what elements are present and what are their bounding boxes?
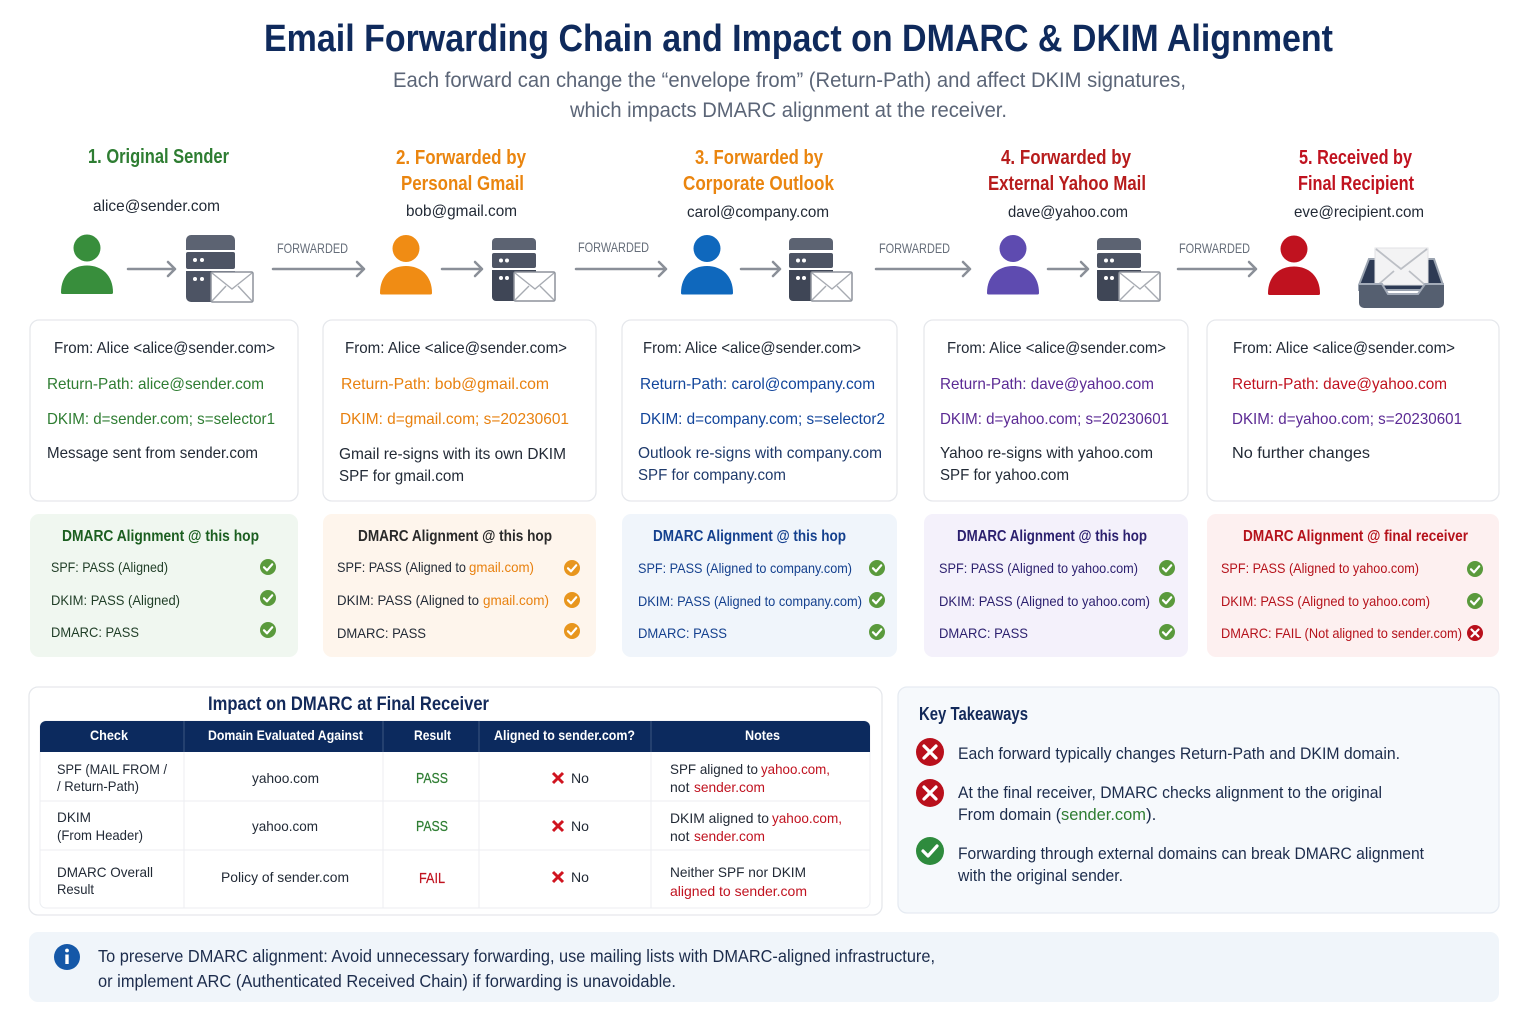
step 4 header (988, 147, 1146, 221)
step 3 header: Corporate Outlook (683, 173, 835, 195)
panel: card 2 headers: SPF for gmail.com (339, 468, 464, 485)
banner text: or implement ARC (Authenticated Received Chain) if forwarding is unavoidable. (98, 971, 676, 991)
panel: key takeaways (898, 687, 1499, 913)
panel: card 5 headers (1207, 320, 1499, 501)
table row: DKIM: No (571, 818, 589, 834)
panel: alignment 5 (1207, 514, 1499, 657)
table row: DMARC (57, 864, 807, 899)
step 2 header: bob@gmail.com (406, 203, 517, 220)
icon: server 3 (789, 238, 852, 301)
table row: DKIM: not (670, 828, 690, 844)
panel: impact table (29, 687, 882, 915)
panel: alignment 4: DKIM: PASS (Aligned to yahoo.com) (939, 593, 1150, 609)
banner text: To preserve DMARC alignment: Avoid unnecessary forwarding, use mailing lists with DMARC-aligned infrastructure, (98, 946, 935, 966)
table row: SPF: not (670, 779, 690, 795)
panel: alignment 5: DKIM: PASS (Aligned to yahoo.com) (1221, 593, 1430, 609)
table header row (40, 721, 870, 752)
panel: card 1 headers: Message sent from sender.com (47, 445, 258, 462)
takeaway 1: Each forward typically changes Return-Path and DKIM domain. (958, 744, 1400, 763)
icon: inbox tray (1359, 248, 1444, 308)
arrow: forward 3 (876, 262, 970, 276)
table row: SPF: sender.com (694, 779, 765, 795)
panel: alignment 3: DMARC: PASS (638, 625, 727, 641)
label: forwarded 4: FORWARDED (1179, 240, 1250, 256)
panel: alignment 2: gmail.com) (483, 592, 549, 608)
panel: card 1 headers: From: Alice <alice@sender.com> (54, 340, 275, 357)
panel: alignment 1: SPF: PASS (Aligned) (51, 559, 168, 575)
step 2 header: 2. Forwarded by (396, 147, 527, 169)
panel: alignment 3 (622, 514, 897, 657)
step 2 header (396, 147, 527, 220)
table row: SPF: PASS (416, 771, 448, 787)
takeaway 2: sender.com (1061, 805, 1146, 824)
table row: DMARC: Result (57, 881, 94, 897)
step 5 header: eve@recipient.com (1294, 204, 1424, 221)
table header row: Aligned to sender.com? (494, 727, 635, 743)
table row: SPF: / Return-Path) (57, 778, 139, 794)
table row: DKIM: sender.com (694, 828, 765, 844)
panel: alignment 4: SPF: PASS (Aligned to yahoo.com) (939, 560, 1138, 576)
step 1 header: alice@sender.com (93, 198, 220, 215)
arrow: forward 1 (273, 262, 364, 276)
table row: DKIM: PASS (416, 819, 448, 835)
panel: alignment 2 (323, 514, 596, 657)
table row: SPF: SPF (MAIL FROM / (57, 761, 167, 777)
panel: alignment 1: DMARC: PASS (51, 624, 139, 640)
table row: DKIM: yahoo.com, (772, 810, 842, 826)
icon: info (54, 944, 80, 970)
table row: SPF: yahoo.com (252, 770, 319, 786)
table body frame (40, 721, 870, 908)
panel: alignment 5: SPF: PASS (Aligned to yahoo.com) (1221, 560, 1419, 576)
table row: DMARC: aligned to sender.com (670, 883, 807, 899)
panel: card 4 headers: DKIM: d=yahoo.com; s=20230601 (940, 411, 1169, 428)
panel: card 2 headers: Return-Path: bob@gmail.com (341, 376, 549, 393)
step 5 header: 5. Received by (1299, 147, 1413, 169)
table heading: Impact on DMARC at Final Receiver (208, 694, 490, 715)
panel: card 1 headers: Return-Path: alice@sender.com (47, 376, 264, 393)
panel: alignment 3: DKIM: PASS (Aligned to company.com) (638, 593, 862, 609)
step 5 header: Final Recipient (1298, 173, 1414, 195)
step 4 header: External Yahoo Mail (988, 173, 1146, 195)
step 5 header (1294, 147, 1424, 221)
takeaway 3: Forwarding through external domains can break DMARC alignment (958, 844, 1424, 863)
table row: DKIM: yahoo.com (252, 818, 318, 834)
panel: alignment 1: DMARC Alignment @ this hop (62, 528, 259, 545)
table row: DMARC: Policy of sender.com (221, 869, 349, 885)
panel: card 3 headers: From: Alice <alice@sender.com> (643, 340, 861, 357)
table header row: Notes (745, 727, 780, 743)
subtitle (393, 69, 1186, 122)
panel: card 2 headers: From: Alice <alice@sender.com> (345, 340, 567, 357)
panel: alignment 2: DKIM: PASS (Aligned to (337, 592, 479, 608)
step 4 header: dave@yahoo.com (1008, 204, 1128, 221)
step 2 header: Personal Gmail (401, 173, 524, 195)
step 3 header: carol@company.com (687, 204, 829, 221)
table header row: Check (90, 727, 128, 743)
panel: alignment 5: DMARC: FAIL (Not aligned to sender.com) (1221, 625, 1462, 641)
panel: alignment 4: DMARC Alignment @ this hop (957, 528, 1147, 545)
arrow: forward 4 (1178, 262, 1256, 276)
table row: SPF: yahoo.com, (761, 761, 830, 777)
panel: card 5 headers: From: Alice <alice@sender.com> (1233, 340, 1455, 357)
icon: server 4 (1097, 238, 1160, 301)
arrow: Dave to server (1048, 262, 1088, 276)
panel: alignment 5: DMARC Alignment @ final receiver (1243, 528, 1468, 545)
icon: server 1 (186, 235, 253, 302)
panel: card 3 headers: Outlook re-signs with company.com (638, 445, 882, 462)
panel: card 2 headers: DKIM: d=gmail.com; s=20230601 (340, 411, 569, 428)
panel: card 4 headers: SPF for yahoo.com (940, 467, 1069, 484)
icon: server 2 (492, 238, 555, 301)
takeaway 2: At the final receiver, DMARC checks alignment to the original (958, 783, 1382, 802)
table row: DKIM: DKIM aligned to (670, 810, 769, 826)
step 1 header: 1. Original Sender (88, 146, 229, 168)
icon: person sender (61, 234, 113, 294)
panel: card 3 headers: Return-Path: carol@company.com (640, 376, 875, 393)
step 3 header (683, 147, 835, 221)
panel: alignment 2: DMARC: PASS (337, 625, 426, 641)
table row: DMARC: DMARC Overall (57, 864, 153, 880)
panel: card 5 headers: DKIM: d=yahoo.com; s=20230601 (1232, 411, 1462, 428)
panel: alignment 2: SPF: PASS (Aligned to (337, 559, 466, 575)
icon: person Eve (1268, 236, 1320, 295)
table row: DKIM (57, 809, 842, 844)
table row: DMARC: FAIL (419, 871, 445, 887)
takeaway 2: ). (1146, 805, 1156, 824)
banner text (98, 946, 935, 991)
takeaway 3 (916, 837, 1424, 885)
table header row: Result (414, 727, 451, 743)
title: Email Forwarding Chain and Impact on DMARC & DKIM Alignment (264, 18, 1333, 60)
step 4 header: 4. Forwarded by (1001, 147, 1132, 169)
panel: card 4 headers (924, 320, 1188, 501)
panel: recommendation banner (29, 932, 1499, 1002)
panel: card 1 headers: DKIM: d=sender.com; s=selector1 (47, 411, 275, 428)
arrow: Bob to server (442, 262, 482, 276)
takeaway 3: with the original sender. (957, 866, 1123, 885)
table row: DMARC: Neither SPF nor DKIM (670, 864, 806, 880)
arrow: forward 2 (576, 262, 666, 276)
panel: card 5 headers: Return-Path: dave@yahoo.com (1232, 376, 1447, 393)
takeaway 2: From domain ( (958, 805, 1061, 824)
panel: card 1 headers (30, 320, 298, 501)
label: forwarded 1: FORWARDED (277, 240, 348, 256)
table row: DMARC: No (571, 869, 589, 885)
panel: card 5 headers: No further changes (1232, 445, 1370, 462)
subtitle: Each forward can change the “envelope from” (Return-Path) and affect DKIM signatures, (393, 69, 1186, 92)
panel: alignment 3: SPF: PASS (Aligned to company.com) (638, 560, 852, 576)
panel: card 4 headers: From: Alice <alice@sender.com> (947, 340, 1166, 357)
panel: alignment 4 (924, 514, 1188, 657)
panel: alignment 3: DMARC Alignment @ this hop (653, 528, 846, 545)
panel: card 3 headers: DKIM: d=company.com; s=selector2 (640, 411, 885, 428)
panel: alignment 2: gmail.com) (469, 559, 534, 575)
icon: person Dave (987, 235, 1039, 294)
panel: card 2 headers: Gmail re-signs with its own DKIM (339, 446, 566, 463)
panel: alignment 4: DMARC: PASS (939, 625, 1028, 641)
table row: SPF: No (571, 770, 589, 786)
takeaways heading: Key Takeaways (919, 704, 1028, 724)
arrow: Carol to server (741, 262, 780, 276)
icon: person Bob (380, 235, 432, 294)
panel: alignment 1 (30, 514, 298, 657)
panel: card 3 headers (622, 320, 897, 501)
panel: card 3 headers: SPF for company.com (638, 467, 786, 484)
table row: DKIM: DKIM (57, 809, 91, 825)
table row: SPF: SPF aligned to (670, 761, 758, 777)
panel: alignment 2: DMARC Alignment @ this hop (358, 528, 552, 545)
takeaway 1 (916, 738, 1400, 766)
label: forwarded 3: FORWARDED (879, 240, 950, 256)
arrow: sender to server (128, 262, 175, 276)
step 1 header (88, 146, 229, 215)
panel: card 4 headers: Yahoo re-signs with yahoo.com (940, 445, 1153, 462)
table header row: Domain Evaluated Against (208, 727, 363, 743)
table row: DKIM: (From Header) (57, 827, 143, 843)
step 3 header: 3. Forwarded by (695, 147, 824, 169)
takeaway 2 (916, 779, 1382, 824)
panel: alignment 1: DKIM: PASS (Aligned) (51, 592, 180, 608)
subtitle: which impacts DMARC alignment at the receiver. (569, 99, 1007, 122)
panel: card 4 headers: Return-Path: dave@yahoo.com (940, 376, 1154, 393)
panel: card 2 headers (323, 320, 596, 501)
table row: SPF (57, 761, 830, 795)
label: forwarded 2: FORWARDED (578, 239, 649, 255)
icon: person Carol (681, 235, 733, 294)
